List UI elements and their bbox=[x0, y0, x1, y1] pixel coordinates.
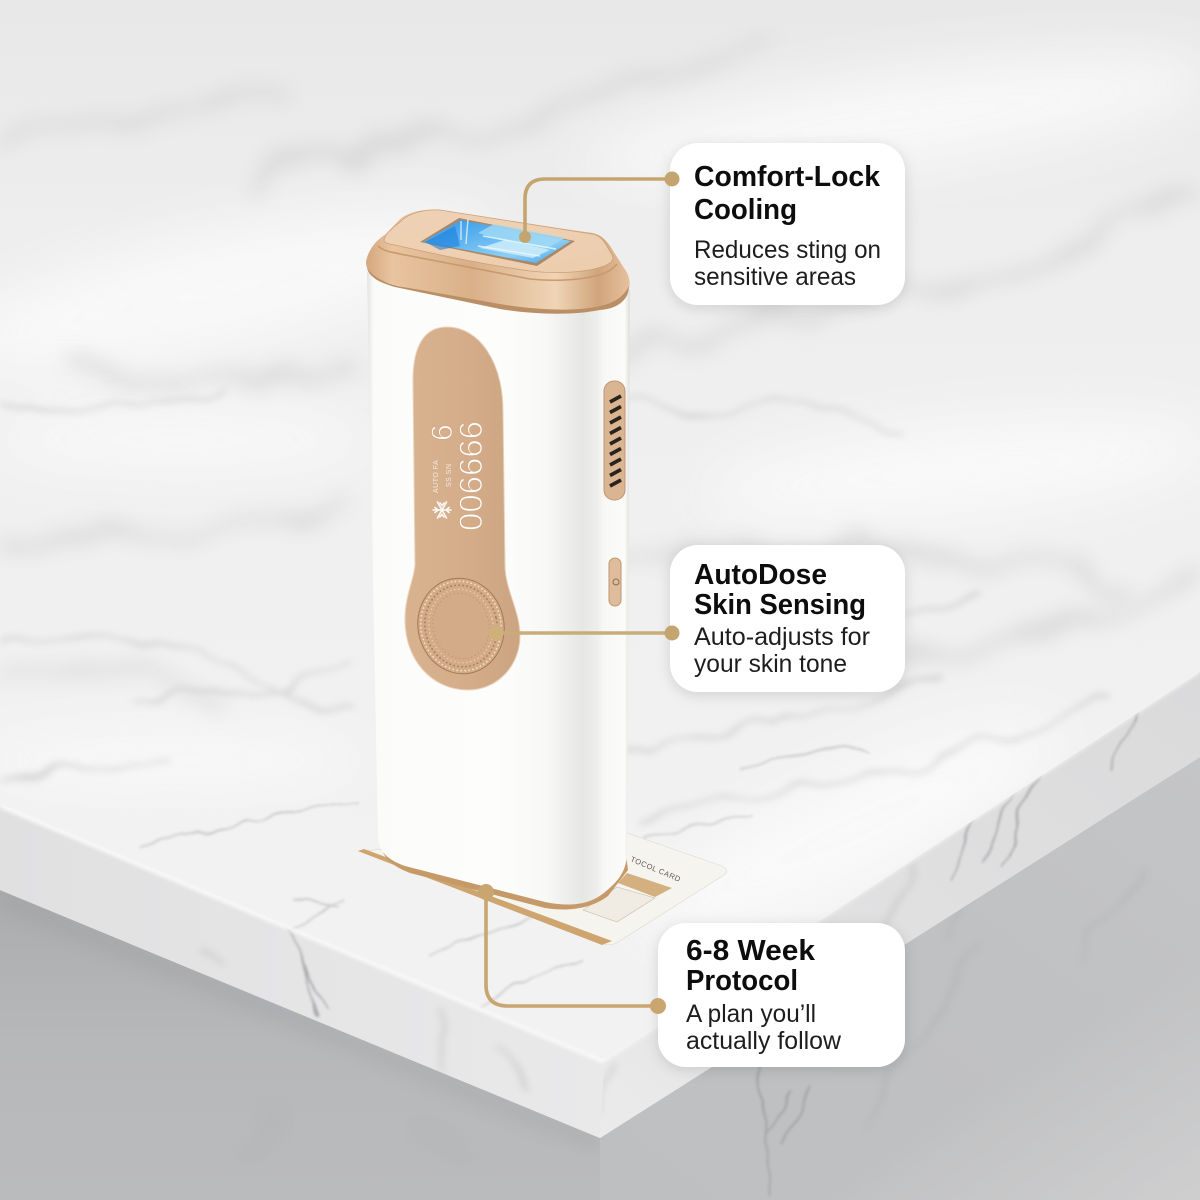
callout heading: Cooling bbox=[694, 194, 797, 226]
counter bevel right bbox=[596, 672, 1200, 1138]
callout heading: 6-8 Week bbox=[686, 935, 816, 967]
sensor disc bbox=[409, 570, 513, 682]
callout heading: Skin Sensing bbox=[694, 589, 866, 621]
icon: snowflake bbox=[433, 502, 451, 518]
callout: 6-8 Week Protocol bbox=[658, 923, 905, 1067]
callout body: Auto-adjusts for bbox=[694, 623, 870, 651]
callout body: Reduces sting on bbox=[694, 236, 881, 264]
callout body: your skin tone bbox=[694, 650, 847, 678]
copper base ring bbox=[381, 835, 628, 910]
callout body: actually follow bbox=[686, 1027, 842, 1055]
connector: 6-8 Week Protocol bbox=[478, 884, 666, 1014]
display panel bbox=[405, 327, 520, 690]
connector: AutoDose Skin Sensing bbox=[488, 626, 680, 640]
display readout: 006666 bbox=[453, 421, 489, 531]
callout: AutoDose Skin Sensing bbox=[670, 545, 905, 692]
callout body: sensitive areas bbox=[694, 263, 856, 291]
collar ridge bbox=[378, 246, 617, 280]
device: handheld IPL body bbox=[366, 210, 630, 910]
display readout: SS SN bbox=[446, 463, 453, 487]
callout: Comfort-Lock Cooling bbox=[670, 143, 905, 305]
counter bevel left bbox=[0, 806, 604, 1138]
protocol card bbox=[358, 833, 727, 945]
display readout bbox=[426, 421, 489, 531]
callout heading: Comfort-Lock bbox=[694, 161, 881, 193]
counter side face right bbox=[600, 757, 1200, 1200]
card label: TOCOL CARD bbox=[629, 855, 682, 884]
white body bbox=[367, 272, 630, 905]
side vent bbox=[604, 381, 625, 500]
counter side face left bbox=[0, 890, 600, 1200]
connector: Comfort-Lock Cooling bbox=[519, 172, 680, 243]
top plate bbox=[384, 210, 613, 273]
callout heading: AutoDose bbox=[694, 559, 827, 591]
display readout: AUTO FA bbox=[433, 460, 440, 493]
display readout: 6 bbox=[426, 424, 459, 441]
floor plane bbox=[1010, 1092, 1200, 1200]
collar bbox=[366, 210, 630, 312]
callout body: A plan you’ll bbox=[686, 1000, 816, 1028]
callout heading: Protocol bbox=[686, 965, 798, 997]
power button bbox=[609, 558, 621, 606]
light window bbox=[420, 218, 575, 266]
